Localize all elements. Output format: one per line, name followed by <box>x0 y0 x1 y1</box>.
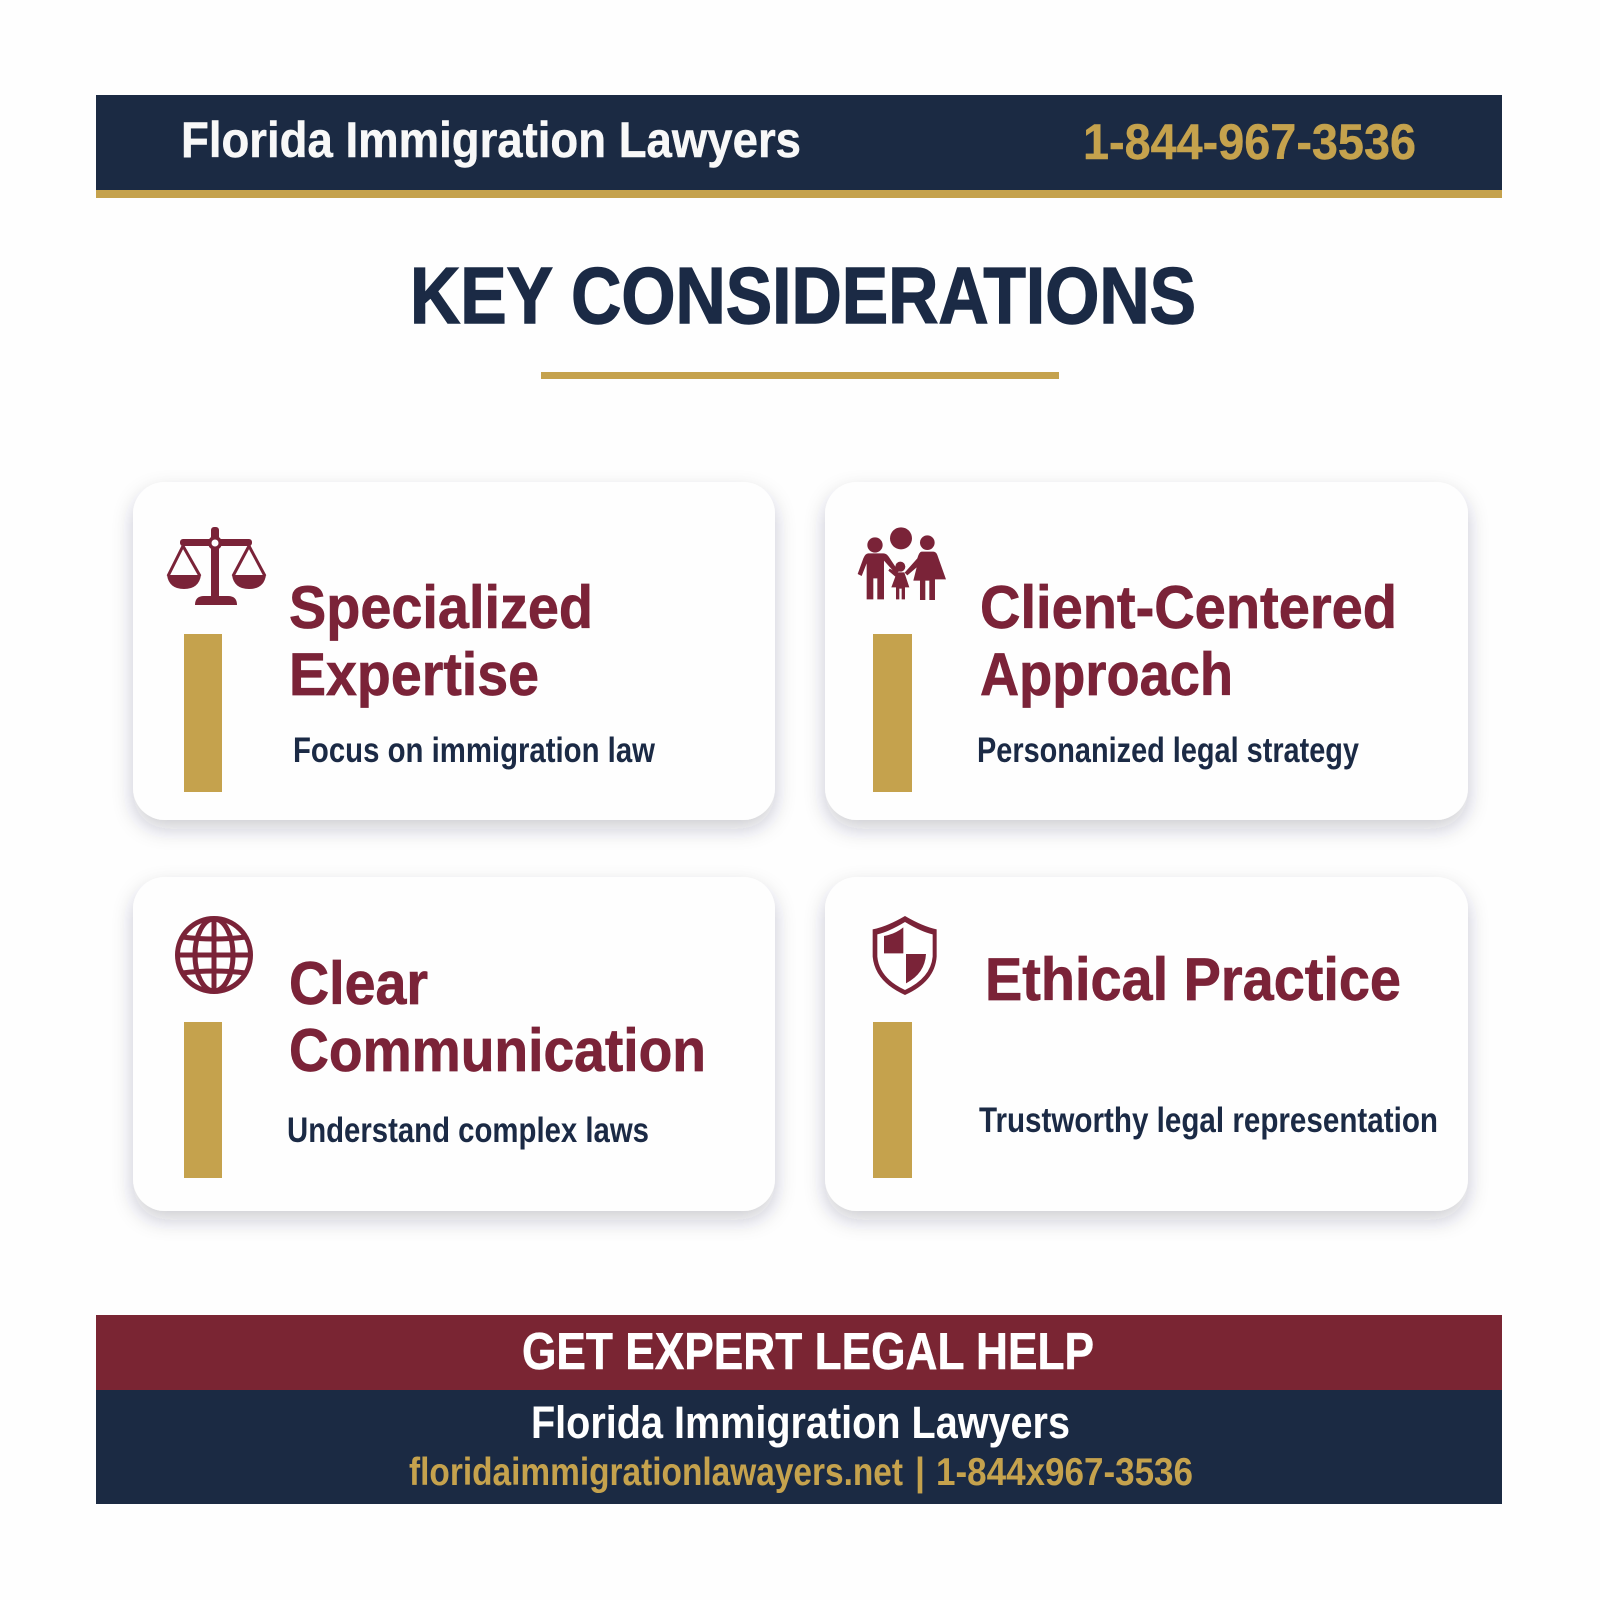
gold accent bar <box>184 1022 222 1178</box>
title underline <box>541 372 1059 379</box>
card heading: Clear <box>289 950 428 1017</box>
card heading: Ethical Practice <box>985 946 1401 1013</box>
footer contact details: floridaimmigrationlawayers.net <box>409 1451 903 1494</box>
card description: Trustworthy legal representation <box>979 1101 1438 1140</box>
panel: client-centered approach <box>825 482 1468 820</box>
icon: scales of justice <box>167 527 266 605</box>
card description: Understand complex laws <box>287 1111 649 1150</box>
footer contact details: 1-844x967-3536 <box>936 1451 1193 1494</box>
gold accent bar <box>184 634 222 792</box>
footer firm name: Florida Immigration Lawyers <box>531 1397 1070 1448</box>
card description: Focus on immigration law <box>293 731 656 770</box>
card heading: Expertise <box>289 641 539 708</box>
card description: Personanized legal strategy <box>977 731 1359 770</box>
gold accent bar <box>873 1022 912 1178</box>
gold accent bar <box>873 634 912 792</box>
card heading: Specialized <box>289 574 593 641</box>
footer contact details: | <box>915 1451 925 1494</box>
header banner <box>96 95 1502 198</box>
panel: clear communication <box>133 877 775 1211</box>
icon: globe <box>178 918 250 992</box>
icon: family <box>858 527 946 600</box>
footer call to action <box>96 1315 1502 1504</box>
card heading: Communication <box>289 1017 706 1084</box>
panel: specialized expertise <box>133 482 775 820</box>
title: KEY CONSIDERATIONS <box>410 251 1196 340</box>
panel: ethical practice <box>825 877 1468 1211</box>
header firm name: Florida Immigration Lawyers <box>181 112 801 168</box>
footer heading: GET EXPERT LEGAL HELP <box>522 1323 1094 1381</box>
card heading: Approach <box>980 641 1233 708</box>
card heading: Client-Centered <box>980 574 1397 641</box>
header phone number: 1-844-967-3536 <box>1083 114 1416 170</box>
icon: shield <box>873 916 937 995</box>
